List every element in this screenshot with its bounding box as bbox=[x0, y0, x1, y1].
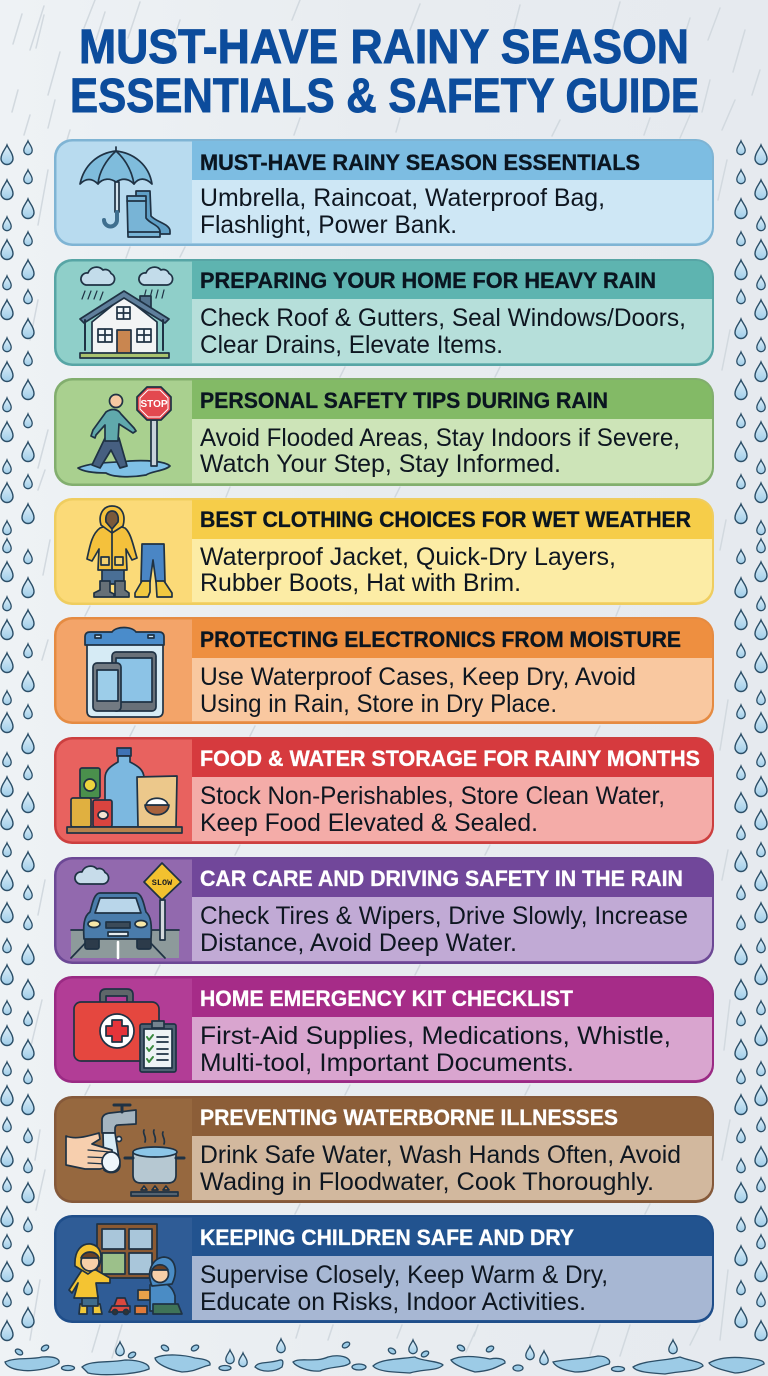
body text: Supervise Closely, Keep Warm & Dry, bbox=[200, 1261, 608, 1289]
body text: Wading in Floodwater, Cook Thoroughly. bbox=[200, 1168, 654, 1196]
title bbox=[70, 21, 699, 123]
panel: food and water bbox=[54, 737, 714, 844]
body text: Check Roof & Gutters, Seal Windows/Doors, bbox=[200, 304, 686, 332]
panel: must-have essentials bbox=[54, 139, 714, 246]
heading: PREVENTING WATERBORNE ILLNESSES bbox=[200, 1105, 618, 1130]
panel: car care bbox=[54, 857, 714, 964]
body text: Waterproof Jacket, Quick-Dry Layers, bbox=[200, 543, 616, 571]
heading: HOME EMERGENCY KIT CHECKLIST bbox=[200, 986, 574, 1011]
panel: electronics bbox=[54, 617, 714, 724]
body text: First-Aid Supplies, Medications, Whistle, bbox=[200, 1022, 671, 1050]
icon: person in puddle with stop sign bbox=[78, 387, 171, 477]
body text: Drink Safe Water, Wash Hands Often, Avoid bbox=[200, 1141, 681, 1169]
body text: Watch Your Step, Stay Informed. bbox=[200, 450, 561, 478]
icon: first aid kit and checklist bbox=[74, 989, 176, 1072]
icon: raincoat and jeans with boots bbox=[87, 506, 172, 597]
body text: Using in Rain, Store in Dry Place. bbox=[200, 690, 557, 718]
heading: PREPARING YOUR HOME FOR HEAVY RAIN bbox=[200, 268, 656, 293]
panel: waterborne illnesses bbox=[54, 1096, 714, 1203]
left raindrop columns bbox=[1, 141, 34, 1340]
body text: Stock Non-Perishables, Store Clean Water, bbox=[200, 782, 665, 810]
icon: person in puddle with stop sign: STOP bbox=[140, 399, 168, 410]
right raindrop columns bbox=[735, 141, 767, 1340]
icon: car in rain with slow sign bbox=[71, 863, 181, 958]
body text bbox=[200, 184, 605, 239]
icon: children playing indoors bbox=[69, 1224, 182, 1314]
body text: Check Tires & Wipers, Drive Slowly, Increase bbox=[200, 902, 688, 930]
heading: BEST CLOTHING CHOICES FOR WET WEATHER bbox=[200, 507, 691, 532]
body text: Multi-tool, Important Documents. bbox=[200, 1049, 574, 1077]
body text: Clear Drains, Elevate Items. bbox=[200, 331, 503, 359]
body text bbox=[200, 1141, 681, 1196]
body text: Use Waterproof Cases, Keep Dry, Avoid bbox=[200, 663, 636, 691]
heading: PROTECTING ELECTRONICS FROM MOISTURE bbox=[200, 627, 681, 652]
icon: hand washing and boiling pot bbox=[66, 1105, 184, 1196]
icon: waterproof case with devices bbox=[85, 628, 164, 717]
heading: PERSONAL SAFETY TIPS DURING RAIN bbox=[200, 388, 608, 413]
body text: Educate on Risks, Indoor Activities. bbox=[200, 1288, 586, 1316]
heading: CAR CARE AND DRIVING SAFETY IN THE RAIN bbox=[200, 866, 683, 891]
panel: preparing your home bbox=[54, 259, 714, 366]
body text: Keep Food Elevated & Sealed. bbox=[200, 809, 538, 837]
body text: Rubber Boots, Hat with Brim. bbox=[200, 569, 521, 597]
body text bbox=[200, 663, 636, 718]
body text: Umbrella, Raincoat, Waterproof Bag, bbox=[200, 184, 605, 212]
panel: clothing bbox=[54, 498, 714, 605]
body text: Flashlight, Power Bank. bbox=[200, 211, 457, 239]
body text: Distance, Avoid Deep Water. bbox=[200, 929, 517, 957]
body text bbox=[200, 543, 616, 597]
panel: emergency kit bbox=[54, 976, 714, 1083]
puddles bbox=[5, 1339, 764, 1375]
panel: children bbox=[54, 1215, 714, 1323]
body text bbox=[200, 1261, 608, 1316]
panel: personal safety bbox=[54, 378, 714, 486]
icon: canned food, bottle and rice bbox=[67, 748, 182, 833]
body text bbox=[200, 1022, 671, 1077]
icon: umbrella and boots bbox=[80, 147, 170, 237]
heading: FOOD & WATER STORAGE FOR RAINY MONTHS bbox=[200, 746, 700, 771]
body text: Avoid Flooded Areas, Stay Indoors if Severe, bbox=[200, 424, 680, 452]
heading: MUST-HAVE RAINY SEASON ESSENTIALS bbox=[200, 150, 640, 175]
title: MUST-HAVE RAINY SEASON bbox=[79, 21, 689, 74]
body text bbox=[200, 902, 688, 957]
heading: KEEPING CHILDREN SAFE AND DRY bbox=[200, 1225, 574, 1250]
body text bbox=[200, 424, 680, 478]
title: ESSENTIALS & SAFETY GUIDE bbox=[70, 70, 699, 123]
icon: house in rain bbox=[80, 267, 173, 358]
icon: car in rain with slow sign: SLOW bbox=[152, 878, 173, 888]
body text bbox=[200, 304, 686, 359]
body text bbox=[200, 782, 665, 837]
